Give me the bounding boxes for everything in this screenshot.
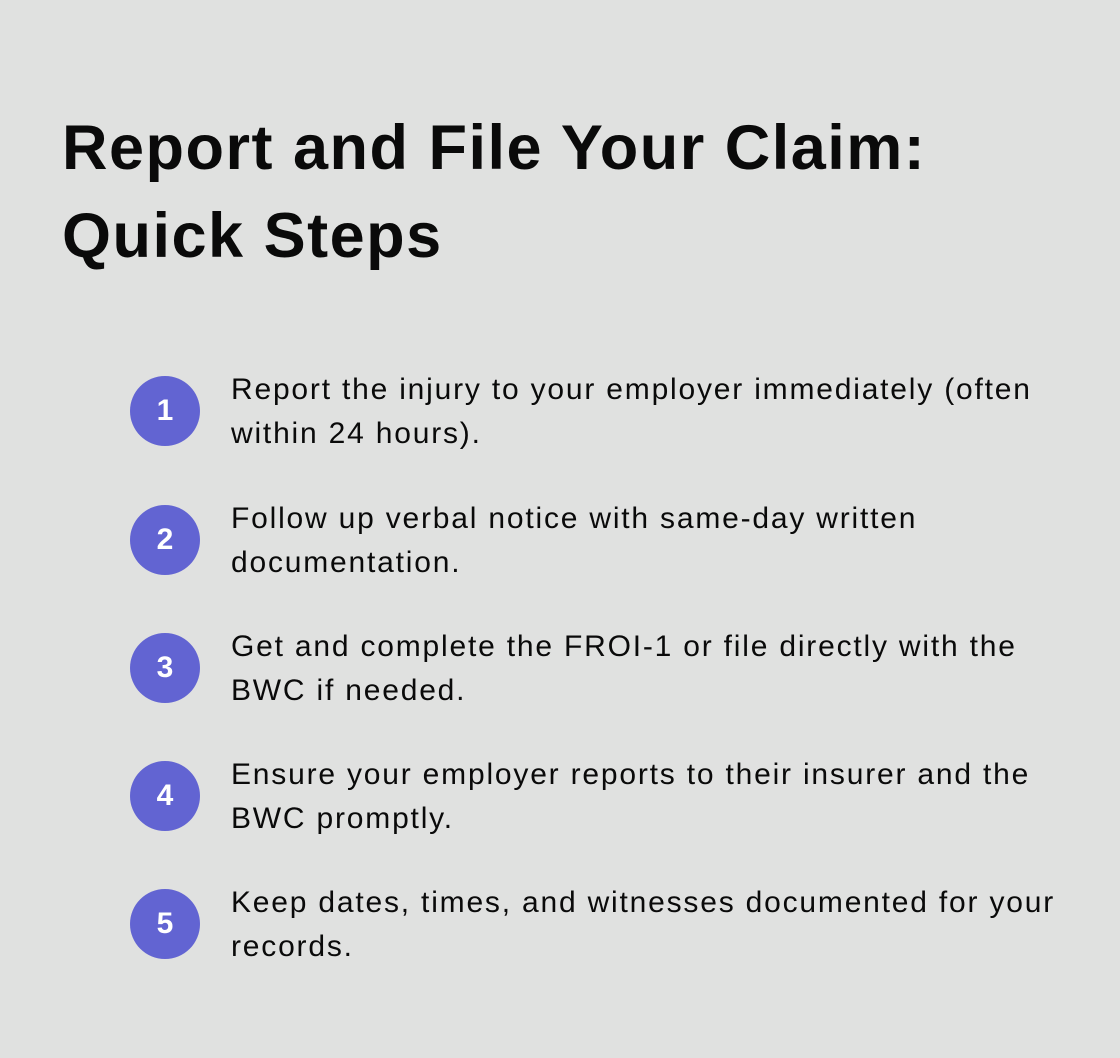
icon: number 2: 2 xyxy=(157,523,173,556)
title: Report and File Your Claim: xyxy=(62,113,926,183)
step 4 xyxy=(130,758,1030,835)
text: step 5: Keep dates, times, and witnesses documented for your xyxy=(231,886,1055,919)
icon: number 1 xyxy=(130,376,200,446)
text: step 2: documentation. xyxy=(231,546,461,579)
text: step 5: records. xyxy=(231,930,354,963)
icon: number 5 xyxy=(130,889,200,959)
icon: number 1: 1 xyxy=(157,394,173,427)
text: step 1 xyxy=(231,373,1032,450)
text: step 3: BWC if needed. xyxy=(231,674,466,707)
text: step 4: Ensure your employer reports to their insurer and the xyxy=(231,758,1030,791)
text: step 1: Report the injury to your employer immediately (often xyxy=(231,373,1032,406)
icon: number 4: 4 xyxy=(157,779,173,812)
icon: number 3: 3 xyxy=(157,651,173,684)
text: step 4: BWC promptly. xyxy=(231,802,454,835)
title xyxy=(62,113,926,271)
icon: number 5: 5 xyxy=(157,907,173,940)
icon: number 4 xyxy=(130,761,200,831)
step 3 xyxy=(130,630,1017,707)
text: step 5 xyxy=(231,886,1055,963)
text: step 3 xyxy=(231,630,1017,707)
title: Quick Steps xyxy=(62,201,443,271)
text: step 2 xyxy=(231,502,917,579)
text: step 2: Follow up verbal notice with same-day written xyxy=(231,502,917,535)
icon: number 2 xyxy=(130,505,200,575)
text: step 3: Get and complete the FROI-1 or file directly with the xyxy=(231,630,1017,663)
step 2 xyxy=(130,502,917,579)
text: step 1: within 24 hours). xyxy=(231,417,482,450)
step 5 xyxy=(130,886,1055,963)
step 1 xyxy=(130,373,1032,450)
icon: number 3 xyxy=(130,633,200,703)
text: step 4 xyxy=(231,758,1030,835)
